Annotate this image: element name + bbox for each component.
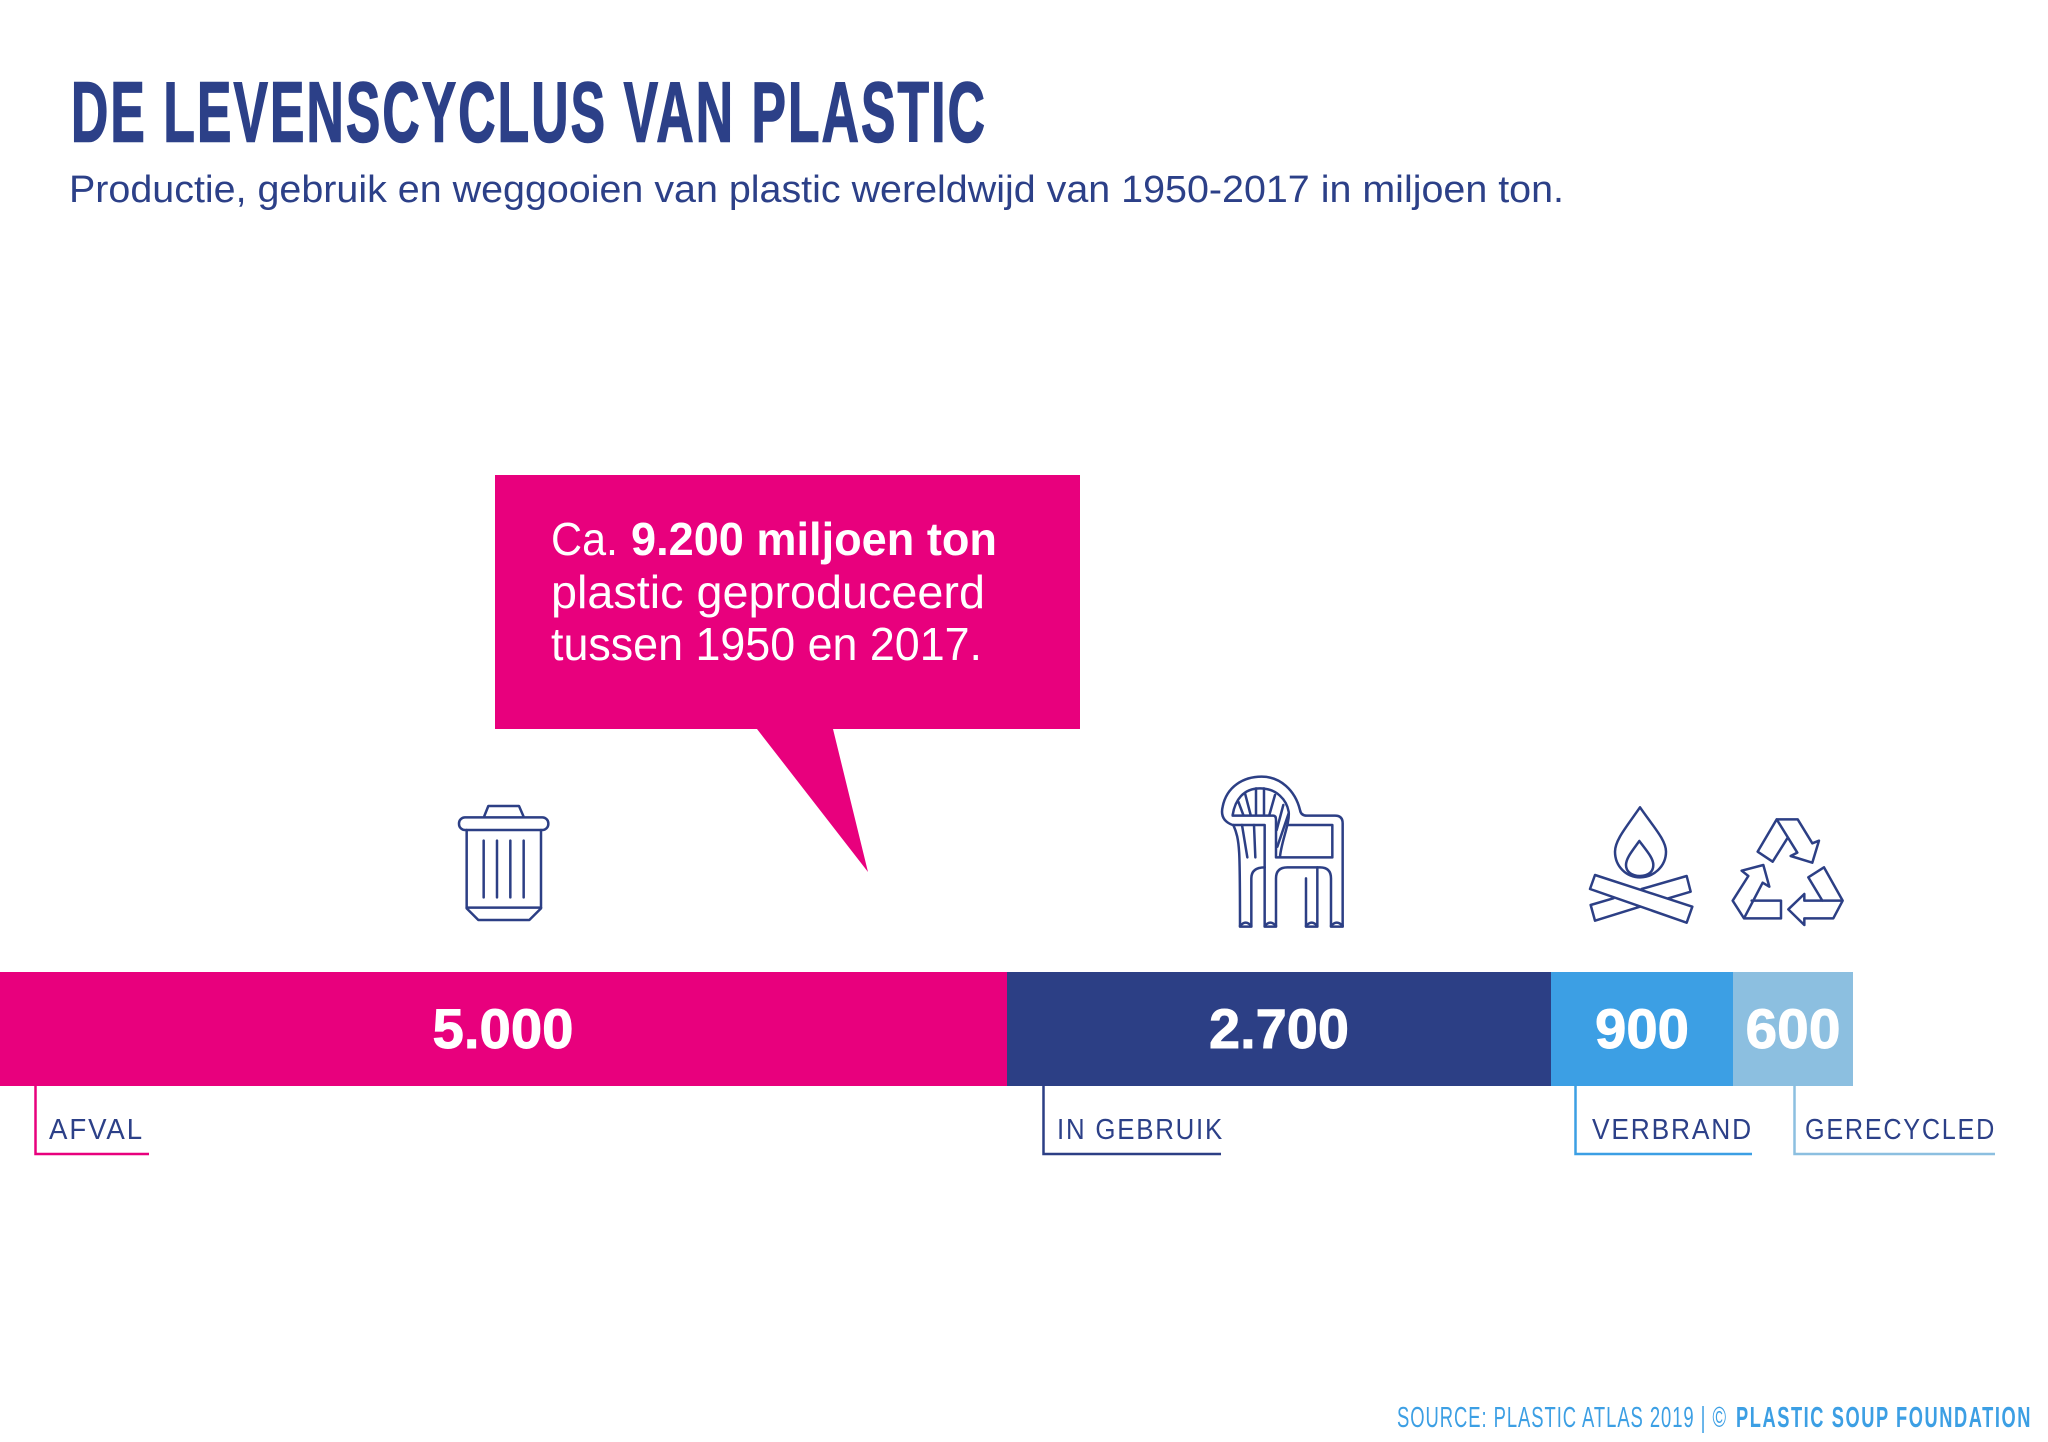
label: in gebruik: IN GEBRUIK: [1057, 1114, 1224, 1146]
bar segment: verbrand: 900: [1595, 997, 1689, 1060]
label: verbrand: VERBRAND: [1592, 1114, 1753, 1146]
bar segment: afval: 5.000: [432, 997, 574, 1060]
bar segment: gerecycled: [1733, 972, 1853, 1086]
icon: trash can: [459, 806, 548, 920]
callout text: 9.200 miljoen ton: [631, 513, 997, 565]
callout: total production: [495, 475, 1080, 872]
callout text: [551, 513, 997, 670]
label: gerecycled: GERECYCLED: [1805, 1114, 1996, 1146]
label: afval: AFVAL: [49, 1114, 144, 1146]
stacked bar: [0, 972, 1853, 1086]
callout shape: [495, 475, 1080, 872]
icon: garden chair: [1222, 777, 1343, 927]
icon: recycling: [1733, 819, 1843, 925]
label: in gebruik: [1044, 1086, 1224, 1154]
title: DE LEVENSCYCLUS VAN PLASTIC: [71, 66, 987, 160]
bar segment: gerecycled: 600: [1746, 997, 1840, 1060]
bar segment: in gebruik: [1007, 972, 1551, 1086]
icon: fire: [1590, 807, 1692, 923]
label: gerecycled: [1794, 1086, 1996, 1154]
label: verbrand: [1576, 1086, 1753, 1154]
callout text: tussen 1950 en 2017.: [551, 618, 982, 670]
bar segment: in gebruik: 2.700: [1209, 997, 1349, 1060]
bar segment: verbrand: [1551, 972, 1733, 1086]
subtitle: Productie, gebruik en weggooien van plastic wereldwijd van 1950-2017 in miljoen ton.: [69, 169, 1564, 211]
label: afval: [36, 1086, 149, 1154]
callout text: plastic geproduceerd: [551, 566, 985, 618]
source line: SOURCE: PLASTIC ATLAS 2019 | ©: [1397, 1402, 1727, 1434]
callout text: Ca.: [551, 513, 618, 565]
bar segment: afval: [0, 972, 1007, 1086]
